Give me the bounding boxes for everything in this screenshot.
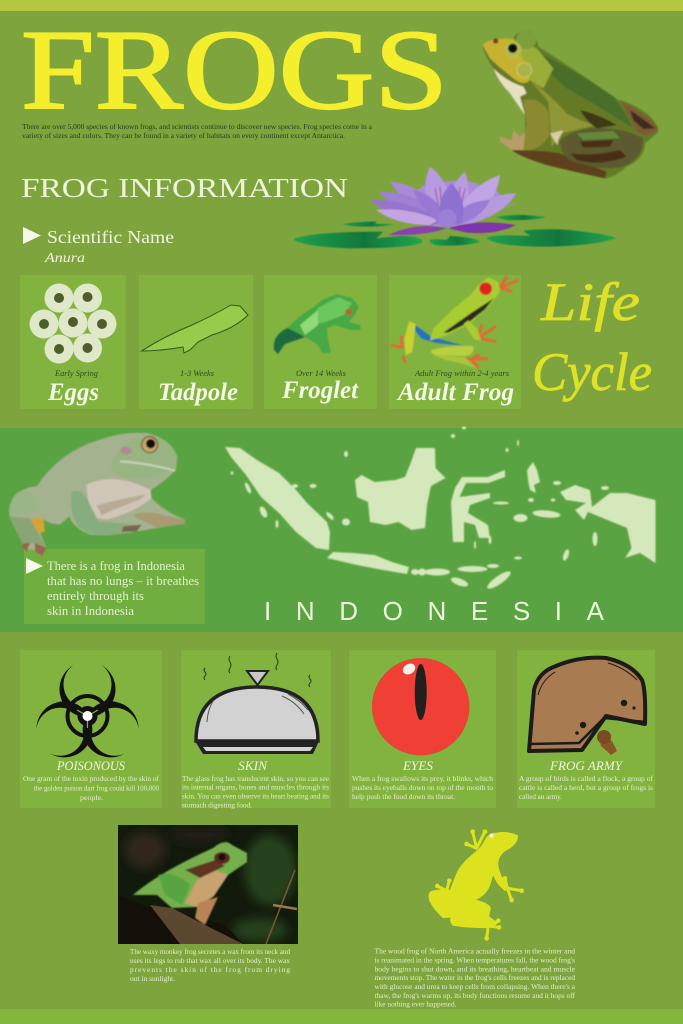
panel: poisonous: One gram of the toxin produced by the skin of [23,774,160,783]
panel: eyes [349,650,496,808]
icon: red-eyed tree frog [392,277,518,368]
map of indonesia [225,426,656,591]
text: waxy monkey frog: prevents the skin of the frog from drying [130,965,290,974]
text: wood frog: thaw, the frog's warms up, its body functions resume and it hops off [374,991,576,1000]
icon: frog eggs [30,284,116,364]
panel: eyes: When a frog swallows its prey, it blinks, which [352,774,493,783]
panel: tadpole: 1-3 Weeks [180,369,214,378]
panel: eggs [20,275,126,409]
panel: adult frog: Adult Frog within 2-4 years [414,369,509,378]
callout: no lungs: entirely through its [47,589,144,603]
panel: skin: its internal organs, bones and muscles through its [182,782,329,792]
panel: frog army: FROG ARMY [549,759,624,773]
panel: eyes: pushes its eyeballs down on top of the mouth to [352,783,493,792]
panel: froglet: Over 14 Weeks [296,369,346,378]
icon: bullet triangle [23,227,41,244]
panel: poisonous [20,650,162,808]
text: wood frog: movements stop. The water in the frog's cells freezes and is replaced [374,973,575,982]
panel: eggs: Early Spring [54,369,98,378]
callout: no lungs [24,549,205,624]
icon: froglet [274,294,361,354]
text: waxy monkey frog: The waxy monkey frog secretes a wax from its neck and [130,947,290,956]
panel: frog army: cattle is called a herd, but a group of frogs is [519,783,653,792]
text: waxy monkey frog: out in sunlight. [130,974,175,983]
text: wood frog: like nothing ever happened. [374,1000,457,1008]
heading: frog information: FROG INFORMATION [21,173,348,203]
icon: serving cloche [195,653,319,754]
text: wood frog [374,946,576,1008]
panel: skin: The glass frog has translucent skin, so you can see [182,774,330,783]
illustration: pool frog [483,29,658,178]
panel: poisonous: people. [80,793,103,802]
heading: life cycle: Cycle [532,342,652,402]
panel: eggs: Eggs [47,379,99,406]
panel: tadpole [139,275,253,409]
panel: skin: skin. You can even observe its heart beating and its [182,792,329,800]
panel: adult frog: Adult Frog [396,379,514,406]
icon: yellow frog silhouette [429,829,524,941]
text: waxy monkey frog [130,947,290,983]
callout: no lungs: There is a frog in Indonesia [47,559,185,573]
panel: adult frog [389,275,521,409]
panel: froglet: Froglet [281,377,359,404]
scientific name: Anura [44,251,85,266]
heading: life cycle: Life [540,272,640,332]
illustration: water lily [293,167,616,248]
photo: waxy monkey frog [118,825,298,944]
map label: INDONESIA [264,596,605,626]
icon: biohazard [29,665,146,766]
title: FROGS [21,6,448,133]
scientific name: Scientific Name [47,227,174,247]
top strip [0,0,683,11]
panel: frog army: called an army. [519,792,562,801]
panel: eyes: help push the food down its throat. [352,792,455,801]
intro text: There are over 5,000 species of known frogs, and scientists continue to discover new species. Frog species come in a [22,122,373,131]
text: wood frog: The wood frog of North America actually freezes in the winter and [374,946,575,956]
text: wood frog: with glucose and urea to keep cells from collapsing. When there's a [374,982,576,991]
illustration: white's tree frog [9,433,185,556]
heading: life cycle [532,272,652,402]
bottom strip [0,1009,683,1024]
text: wood frog: body begins to shut down, and its breathing, heartbeat and muscle [374,964,576,974]
intro text [22,122,373,140]
icon: frog eye [371,657,470,756]
panel: frog army: A group of birds is called a flock, a group of [519,774,654,783]
intro text: variety of sizes and colors. They can be found in a variety of habitats on every continent except Antarctica. [22,131,345,140]
icon: bullet triangle [26,558,43,574]
panel: indonesia band [0,426,683,632]
panel: froglet [264,275,377,409]
panel: skin: stomach digesting food. [182,800,252,810]
scientific name [23,227,174,266]
text: waxy monkey frog: uses its legs to rub that wax all over its body. The wax [130,956,290,965]
panel: poisonous: POISONOUS [56,759,126,773]
panel: frog army [517,650,655,808]
icon: tadpole [142,305,248,353]
panel: tadpole: Tadpole [158,379,238,406]
panel: eyes: EYES [402,759,434,773]
icon: army helmet [529,658,646,755]
panel: skin [181,650,331,810]
callout: no lungs: skin in Indonesia [47,604,134,618]
panel: poisonous: the golden poison dart frog could kill 100,000 [34,784,159,792]
callout: no lungs: that has no lungs – it breathes [47,574,199,588]
panel: skin: SKIN [238,759,268,773]
text: wood frog: is reanimated in the spring. When temperatures fall, the wood frog's [374,956,575,964]
